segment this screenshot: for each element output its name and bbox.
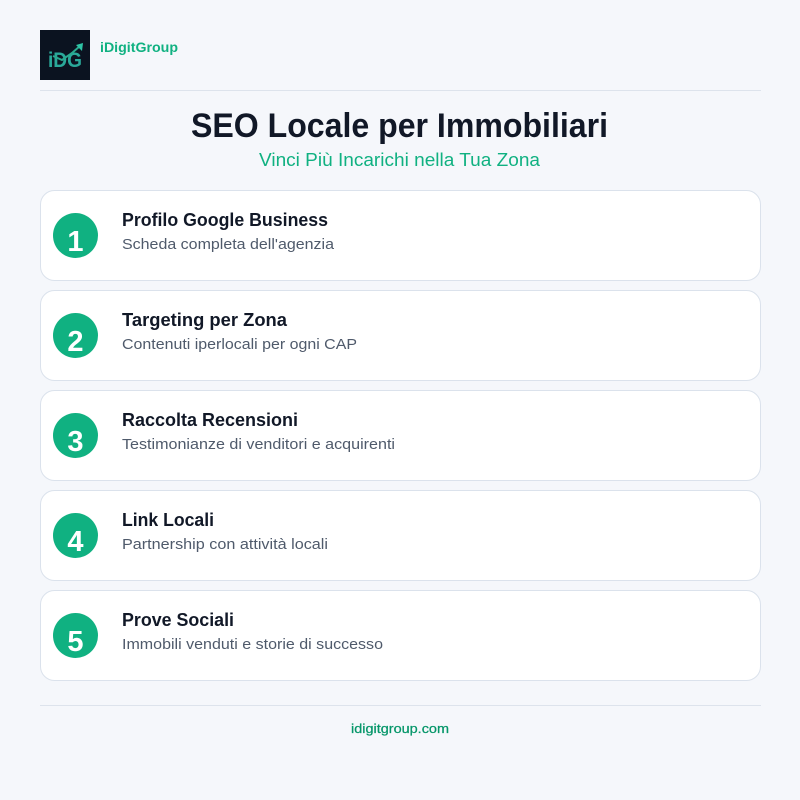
step 5 description: Immobili venduti e storie di successo xyxy=(122,636,383,653)
panel: step 5 xyxy=(40,590,760,680)
footer: website: idigitgroup.com xyxy=(351,721,449,736)
header: brand xyxy=(40,30,178,80)
panel: step 3 xyxy=(40,390,760,480)
icon: iDigitGroup logo: iDG xyxy=(48,49,82,72)
step 5 number badge: 5 xyxy=(67,626,84,658)
step 2 heading: Targeting per Zona xyxy=(122,310,288,330)
step 5 heading: Prove Sociali xyxy=(122,610,234,630)
step 2 description: Contenuti iperlocali per ogni CAP xyxy=(122,336,357,353)
step 5 number badge xyxy=(53,613,98,658)
step 3 description: Testimonianze di venditori e acquirenti xyxy=(122,436,395,453)
panel: step 2 xyxy=(40,290,760,380)
panel: step 4 xyxy=(40,490,760,580)
panel: step 1 xyxy=(40,190,760,280)
step 4 heading: Link Locali xyxy=(122,510,214,530)
step 3 heading: Raccolta Recensioni xyxy=(122,410,298,430)
step 3 number badge xyxy=(53,413,98,458)
step 2 number badge xyxy=(53,313,98,358)
step 1 description: Scheda completa dell'agenzia xyxy=(122,236,335,253)
step 4 number badge: 4 xyxy=(67,526,84,558)
step 3 number badge: 3 xyxy=(67,426,84,458)
step 4 number badge xyxy=(53,513,98,558)
step 1 number badge: 1 xyxy=(67,226,84,258)
step 1 number badge xyxy=(53,213,98,258)
title: SEO Locale per Immobiliari xyxy=(191,107,608,145)
subtitle: Vinci Più Incarichi nella Tua Zona xyxy=(259,150,541,170)
step 4 description: Partnership con attività locali xyxy=(122,536,328,553)
step 1 heading: Profilo Google Business xyxy=(122,210,328,230)
brand name: iDigitGroup xyxy=(100,39,178,55)
step 2 number badge: 2 xyxy=(67,326,84,358)
